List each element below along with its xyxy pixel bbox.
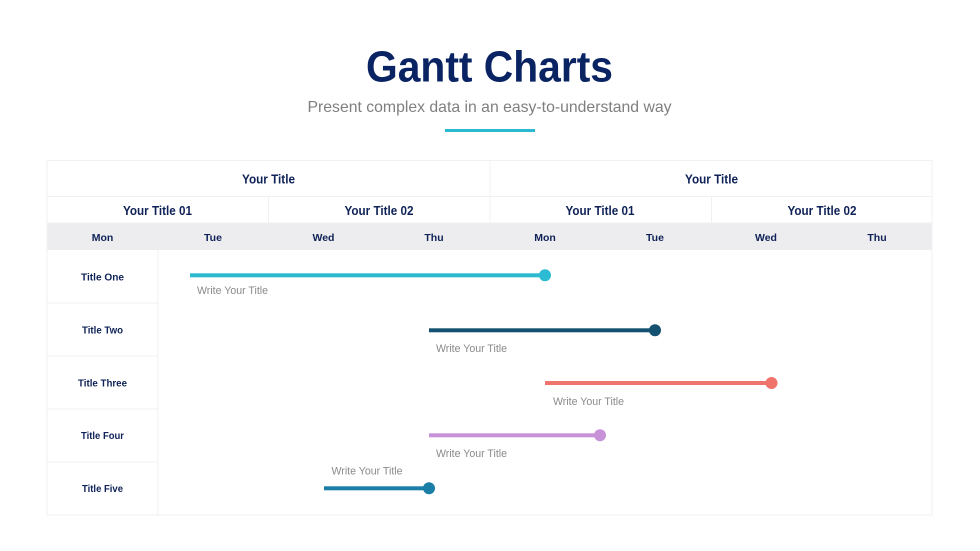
row labels: Title Three <box>78 378 127 390</box>
row labels: Title Two <box>82 324 123 336</box>
task bar: Title Four <box>429 429 606 460</box>
top header row <box>242 172 738 186</box>
task bar: Title Two: Write Your Title <box>436 343 507 355</box>
task bar: Title Three <box>545 377 778 408</box>
sub header row: Your Title 01 <box>566 204 635 218</box>
row labels <box>78 272 127 495</box>
sub header row <box>123 204 857 218</box>
weekday labels: Mon <box>92 232 113 244</box>
task bar: Title Five: Write Your Title <box>332 466 402 478</box>
task bar: Title Four: Write Your Title <box>436 448 507 460</box>
task bar: Title One: Write Your Title <box>197 285 268 297</box>
gantt table <box>47 160 932 515</box>
weekday labels: Wed <box>755 232 777 244</box>
task bar: Title One <box>190 269 551 297</box>
title: Gantt Charts <box>366 42 613 92</box>
top header row: Your Title <box>242 172 295 186</box>
sub header row: Your Title 02 <box>344 204 414 218</box>
weekday labels: Thu <box>424 232 444 244</box>
row labels: Title One <box>81 272 124 284</box>
task bar: Title Three: Write Your Title <box>553 396 624 408</box>
top header row: Your Title <box>685 172 738 186</box>
weekday labels <box>92 232 887 244</box>
weekday header band <box>47 223 932 250</box>
sub header row: Your Title 01 <box>123 204 192 218</box>
weekday labels: Mon <box>534 232 556 244</box>
weekday labels: Wed <box>313 232 334 244</box>
row labels: Title Five <box>82 483 123 495</box>
weekday labels: Tue <box>646 232 664 244</box>
task bar: Title Five <box>324 466 435 494</box>
weekday labels: Tue <box>204 232 222 244</box>
sub header row: Your Title 02 <box>788 204 857 218</box>
row labels: Title Four <box>81 430 124 442</box>
accent underline <box>445 129 535 132</box>
weekday labels: Thu <box>867 232 887 244</box>
task bar: Title Two <box>429 324 661 355</box>
subtitle: Present complex data in an easy-to-understand way <box>308 99 672 116</box>
